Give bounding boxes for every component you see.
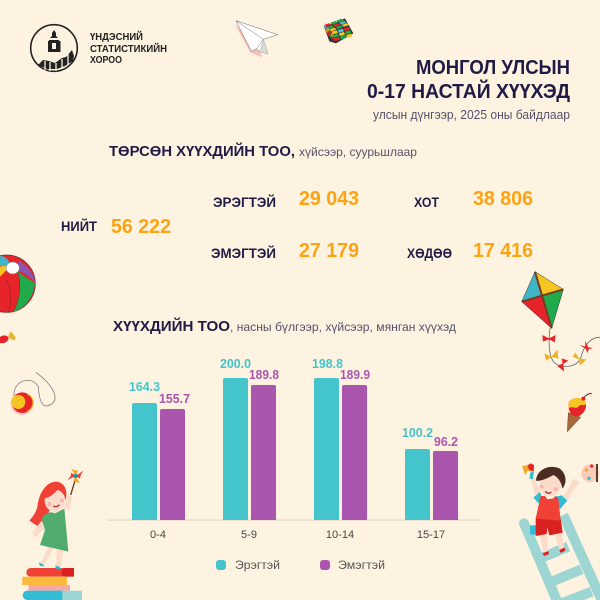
- logo: statistics office emblem and name: [31, 25, 167, 71]
- subtitle: улсын дүнгээр, 2025 оны байдлаар: [373, 107, 570, 122]
- ladder: [524, 515, 600, 600]
- illustration: girl with pinwheel on books: [22, 468, 83, 600]
- icon: paper plane: [234, 21, 278, 57]
- stat: male: ЭРЭГТЭЙ: [213, 195, 276, 210]
- legend: [216, 560, 385, 572]
- sleeves: [533, 492, 567, 509]
- group 0-4: 164.3: [129, 380, 160, 394]
- stat: female: [211, 240, 359, 262]
- logo: statistics office emblem and name: ХОРОО: [90, 54, 122, 66]
- logo: statistics office emblem and name: ҮНДЭСНИЙ: [90, 30, 143, 43]
- face: [45, 490, 65, 512]
- heading: children by age: [113, 317, 456, 335]
- group 0-4: 0-4: [150, 529, 166, 541]
- heading: births: ТӨРСӨН ХҮҮХДИЙН ТОО,: [109, 142, 295, 160]
- title: [367, 57, 570, 103]
- heading: children by age: ХҮҮХДИЙН ТОО: [113, 317, 230, 335]
- hair: [536, 467, 566, 489]
- stat: urban: 38 806: [473, 188, 533, 210]
- title: МОНГОЛ УЛСЫН: [416, 57, 570, 79]
- group 5-9: 189.8: [249, 368, 279, 382]
- icon: yo-yo: [11, 372, 55, 415]
- group 15-17: [402, 426, 458, 541]
- group 10-14: 198.8: [312, 357, 343, 371]
- group 0-4: [129, 380, 190, 541]
- hair: [29, 482, 66, 530]
- stat: rural: ХӨДӨӨ: [407, 246, 452, 261]
- stat: urban: [414, 188, 533, 210]
- legs: [539, 530, 564, 553]
- stat: urban: ХОТ: [414, 195, 440, 210]
- group 0-4: 155.7: [159, 392, 190, 406]
- group 5-9: 200.0: [220, 357, 251, 371]
- stat: rural: [407, 240, 533, 262]
- books: [22, 568, 82, 600]
- stat: male: [213, 188, 359, 210]
- heading: births: хүйсээр, суурьшлаар: [299, 145, 417, 159]
- logo: statistics office emblem and name: СТАТИСТИКИЙН: [90, 42, 167, 55]
- group 5-9: 5-9: [241, 529, 257, 541]
- stat: male: 29 043: [299, 188, 359, 210]
- face: [539, 472, 561, 496]
- icon: kite: [522, 272, 600, 371]
- shorts: [536, 518, 563, 536]
- back foot: [530, 525, 537, 535]
- illustration: boy on ladder: [522, 463, 600, 600]
- icon: ice cream: [567, 393, 592, 432]
- icon: beach ball: [0, 255, 35, 314]
- group 10-14: 10-14: [326, 529, 354, 541]
- legs and feet: [41, 547, 63, 567]
- dress: [40, 509, 68, 552]
- group 15-17: 100.2: [402, 426, 433, 440]
- group 15-17: 96.2: [434, 435, 458, 449]
- paint palette: [581, 464, 599, 482]
- pinwheel: [68, 468, 83, 495]
- paintbrush: [529, 472, 534, 479]
- icon: rubik's cube: [324, 18, 353, 43]
- stat: rural: 17 416: [473, 240, 533, 262]
- stat: total: [61, 216, 171, 238]
- legend: Эрэгтэй: [235, 560, 280, 572]
- group 5-9: [220, 357, 279, 541]
- stat: female: ЭМЭГТЭЙ: [211, 246, 276, 261]
- group 10-14: [312, 357, 370, 541]
- heading: children by age: , насны бүлгээр, хүйсээр, мянган хүүхэд: [230, 320, 456, 334]
- heading: births: [109, 142, 417, 160]
- legend: Эмэгтэй: [338, 560, 385, 572]
- group 10-14: 189.9: [340, 368, 370, 382]
- arms: [529, 473, 576, 503]
- stat: female: 27 179: [299, 240, 359, 262]
- bar chart: [107, 357, 480, 541]
- title: 0-17 НАСТАЙ ХҮҮХЭД: [367, 79, 570, 103]
- stat: total: НИЙТ: [61, 219, 98, 234]
- arms: [32, 495, 72, 537]
- stat: total: 56 222: [111, 216, 171, 238]
- group 15-17: 15-17: [417, 529, 445, 541]
- shirt: [536, 496, 561, 521]
- icon: candy: [0, 331, 16, 345]
